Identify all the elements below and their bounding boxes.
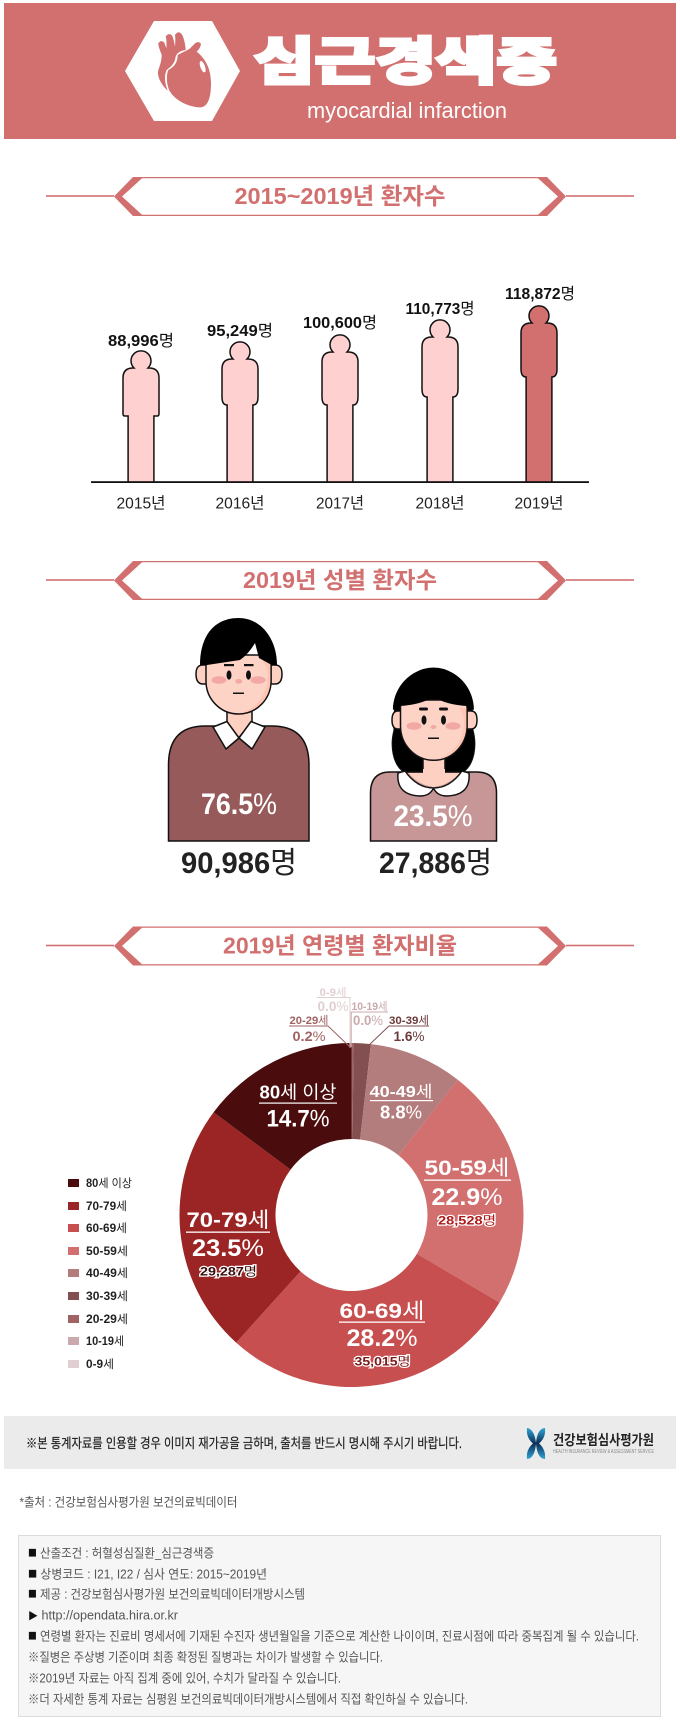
note lines: ■ 연령별 환자는 진료비 명세서에 기재된 수진자 생년월일을 기준으로 계산한 나이이며, 진료시점에 따라 중복집계 될 수 있습니다. — [28, 1628, 639, 1644]
slice 80+ — [214, 1043, 352, 1170]
man ears — [196, 665, 282, 684]
label 50-59: 50-59 세 — [424, 1157, 510, 1180]
bar 2018 — [406, 300, 474, 512]
label 30-39: 1.6% — [394, 1028, 424, 1044]
bar 2017: 2017년 — [316, 494, 364, 512]
bar 2019: 118,872명 — [505, 285, 575, 303]
man hair — [200, 618, 277, 665]
note lines — [28, 1544, 639, 1706]
label 60-69: 28.2% — [346, 1325, 418, 1352]
donut chart: age share — [179, 986, 523, 1387]
notes box — [18, 1536, 660, 1716]
source line: *출처 : 건강보험심사평가원 보건의료빅데이터 — [20, 1496, 238, 1510]
legend item 10-19 — [68, 1335, 124, 1348]
label 40-49: 8.8% — [380, 1102, 422, 1122]
legend item 70-79: 70-79세 — [86, 1200, 127, 1213]
label 60-69: 60-69 세 — [340, 1300, 424, 1323]
man count: 90,986명 — [181, 847, 297, 880]
label 10-19 — [351, 1000, 388, 1047]
logo: HIRA — [527, 1428, 654, 1459]
woman sweater — [370, 772, 496, 841]
label 60-69 — [339, 1300, 425, 1368]
bar 2017 — [303, 314, 377, 512]
label 10-19: 0.0% — [353, 1012, 383, 1028]
bar 2018: 2018년 — [416, 494, 464, 512]
bar 2019 — [505, 285, 575, 512]
legend item 50-59 — [68, 1245, 128, 1258]
legend item 30-39: 30-39세 — [86, 1290, 128, 1303]
legend item 0-9 — [68, 1358, 114, 1371]
label 20-29: 0.2% — [292, 1028, 326, 1044]
woman percentage: 23.5% — [394, 800, 472, 833]
woman hair back — [392, 668, 475, 773]
label 40-49: 40-49 세 — [370, 1083, 432, 1101]
section heading: sex — [46, 561, 634, 600]
label 20-29 — [289, 1014, 351, 1048]
note lines: ※2019년 자료는 아직 집계 중에 있어, 수치가 달라질 수 있습니다. — [28, 1672, 341, 1686]
label 10-19: 10-19세 — [352, 1000, 388, 1013]
label 80+: 80세 이상 — [260, 1082, 336, 1102]
icon: heart in hexagon — [125, 21, 240, 121]
note lines: ▶ http://opendata.hira.or.kr — [28, 1608, 178, 1622]
bar 2015 — [108, 332, 174, 512]
label 70-79: 23.5% — [192, 1235, 264, 1262]
man collar — [213, 722, 265, 749]
illustration: man — [168, 618, 309, 880]
bar 2019: 2019년 — [514, 494, 564, 512]
label 70-79: 70-79 세 — [186, 1209, 270, 1232]
legend item 70-79 — [68, 1200, 127, 1213]
man neck — [227, 708, 252, 738]
man sweater — [168, 726, 309, 841]
section heading: yearly patients — [46, 177, 634, 216]
note lines: ■ 산출조건 : 허혈성심질환_심근경색증 — [28, 1544, 214, 1562]
legend item 20-29 — [68, 1313, 128, 1326]
note lines: ■ 상병코드 : I21, I22 / 심사 연도: 2015~2019년 — [28, 1566, 267, 1582]
woman collar — [398, 771, 469, 796]
legend item 0-9: 0-9세 — [86, 1358, 114, 1371]
label 50-59 — [424, 1157, 511, 1228]
illustration: woman — [370, 668, 496, 880]
label 80+: 14.7% — [266, 1106, 330, 1132]
subtitle: myocardial infarction — [307, 98, 507, 123]
man facial features — [212, 664, 266, 694]
woman facial features — [406, 708, 460, 739]
label 60-69: 35,015 명 — [354, 1354, 410, 1368]
bar 2016: 2016년 — [216, 494, 264, 512]
title: 심근경색증 — [254, 20, 557, 94]
legend — [68, 1177, 132, 1371]
slice 50-59 — [398, 1080, 523, 1303]
slice 30-39 — [352, 1043, 371, 1139]
legend item 60-69: 60-69세 — [86, 1222, 127, 1235]
legend item 20-29: 20-29세 — [86, 1313, 128, 1326]
label 50-59: 22.9% — [432, 1184, 503, 1211]
label 70-79 — [186, 1209, 270, 1278]
note lines: ※더 자세한 통계 자료는 심평원 보건의료빅데이터개방시스템에서 직접 확인하실 수 있습니다. — [28, 1692, 468, 1706]
bar 2015: 2015년 — [116, 494, 166, 512]
bar 2016 — [207, 322, 273, 512]
section heading: sex: 2019년 성별 환자수 — [243, 567, 437, 593]
legend item 10-19: 10-19세 — [86, 1335, 124, 1348]
label 50-59: 28,528 명 — [438, 1214, 496, 1228]
header banner — [4, 3, 676, 139]
label 40-49 — [370, 1083, 433, 1122]
legend item 60-69 — [68, 1222, 127, 1235]
man percentage: 76.5% — [201, 788, 277, 821]
bar 2018: 110,773명 — [406, 300, 474, 318]
label 80+ — [259, 1082, 337, 1132]
label 20-29: 20-29세 — [290, 1014, 328, 1027]
label 70-79: 29,287 명 — [200, 1264, 257, 1278]
woman count: 27,886명 — [379, 847, 492, 880]
bar 2015: 88,996명 — [108, 332, 174, 350]
man face — [206, 655, 271, 714]
legend item 80+ — [68, 1177, 132, 1190]
section heading: yearly patients: 2015~2019년 환자수 — [234, 183, 446, 209]
woman ears — [392, 711, 477, 729]
woman fringe — [393, 668, 474, 710]
section heading: age — [46, 926, 634, 966]
label 30-39 — [368, 1014, 429, 1046]
note lines: ※질병은 주상병 기준이며 최종 확정된 질병과는 차이가 발생할 수 있습니다. — [28, 1650, 383, 1664]
legend item 30-39 — [68, 1290, 128, 1303]
chart: yearly patient pictogram bars — [91, 285, 589, 512]
woman face — [400, 700, 467, 760]
woman neck — [423, 755, 445, 789]
legend item 50-59: 50-59세 — [86, 1245, 128, 1258]
label 0-9: 0-9세 — [320, 986, 346, 999]
legend item 40-49: 40-49세 — [86, 1267, 128, 1280]
section heading: age: 2019년 연령별 환자비율 — [223, 932, 457, 958]
notice band — [4, 1416, 676, 1469]
slice 60-69 — [236, 1254, 500, 1387]
slice 40-49 — [360, 1044, 458, 1155]
label 30-39: 30-39세 — [389, 1014, 429, 1027]
bar 2016: 95,249명 — [207, 322, 273, 340]
legend item 80+: 80세 이상 — [86, 1177, 132, 1190]
notice text: ※본 통계자료를 인용할 경우 이미지 재가공을 금하며, 출처를 반드시 명시해 주시기 바랍니다. — [26, 1436, 462, 1451]
note lines: ■ 제공 : 건강보험심사평가원 보건의료빅데이터개방시스템 — [28, 1586, 305, 1602]
bar 2017: 100,600명 — [303, 314, 377, 332]
slice 20-29 — [352, 1043, 354, 1139]
label 0-9 — [317, 986, 350, 1048]
logo: HIRA: 건강보험심사평가원 — [553, 1432, 654, 1448]
slice 70-79 — [179, 1112, 301, 1343]
label 0-9: 0.0% — [318, 998, 348, 1014]
legend item 40-49 — [68, 1267, 128, 1280]
